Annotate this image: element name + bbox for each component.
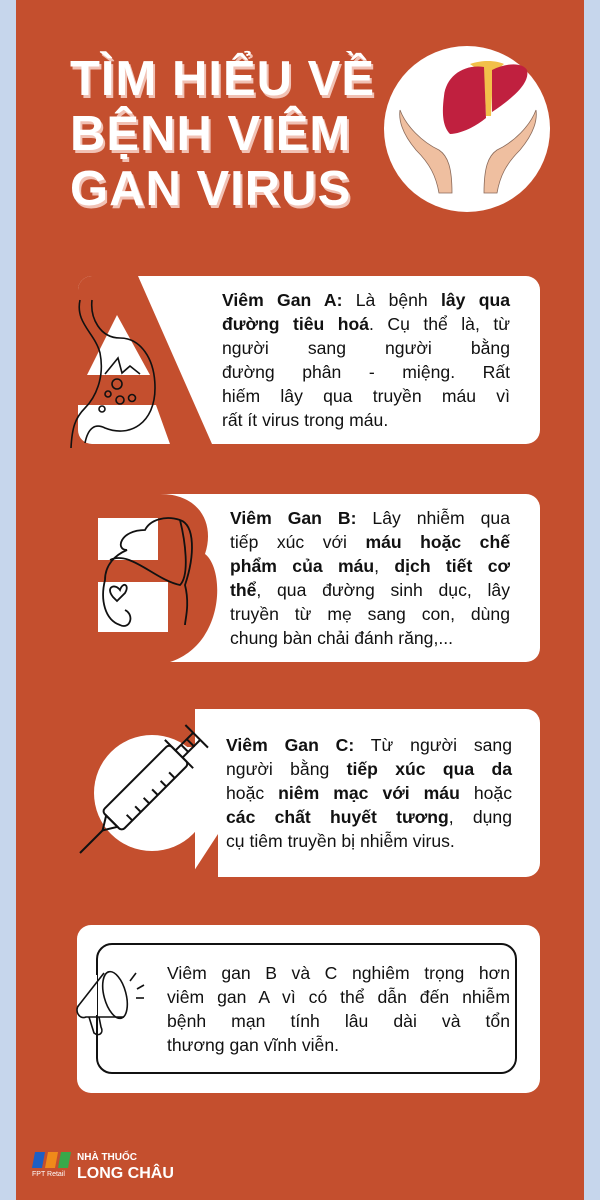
logo: NHÀ THUỐC <box>77 1152 137 1163</box>
text: note: viêm gan A vì có thể dẫn đến nhiễm <box>167 987 510 1007</box>
text: hepatitis C: Viêm Gan C: Từ người sang <box>226 735 512 755</box>
text: hepatitis C: các chất huyết tương, dụng <box>226 807 512 827</box>
logo <box>32 1150 174 1182</box>
title: GAN VIRUS <box>70 162 351 216</box>
text: hepatitis A <box>222 290 510 430</box>
panel: hepatitis B <box>90 494 540 662</box>
text: hepatitis B: truyền từ mẹ sang con, dùng <box>230 604 510 624</box>
text: hepatitis C: hoặc niêm mạc với máu hoặc <box>226 783 512 803</box>
letter C shape <box>94 735 218 877</box>
title: BỆNH VIÊM <box>70 107 351 161</box>
text: hepatitis B: phẩm của máu, dịch tiết cơ <box>230 556 510 576</box>
text: note: Viêm gan B và C nghiêm trọng hơn <box>167 963 510 983</box>
letter B shape <box>90 494 218 662</box>
panel: note <box>77 925 540 1093</box>
text: hepatitis A: người sang người bằng <box>222 338 510 358</box>
text: hepatitis B: tiếp xúc với máu hoặc chế <box>230 532 510 552</box>
text: hepatitis C <box>226 735 512 851</box>
letter A shape <box>78 276 212 444</box>
icon: stomach <box>70 300 156 448</box>
inner outline box <box>96 943 517 1074</box>
text: hepatitis A: đường tiêu hoá. Cụ thể là, từ <box>222 314 510 334</box>
icon: pregnant woman <box>102 517 193 627</box>
text: hepatitis C: người bằng tiếp xúc qua da <box>226 759 512 779</box>
logo: FPT Retail <box>32 1171 65 1178</box>
logo: LONG CHÂU <box>77 1165 174 1182</box>
title <box>70 50 375 216</box>
icon: FPT squares <box>32 1152 71 1168</box>
icon: megaphone <box>76 970 144 1036</box>
panel: hepatitis C <box>195 709 540 877</box>
text: hepatitis A: Viêm Gan A: Là bệnh lây qua <box>222 290 510 310</box>
text: note: thương gan vĩnh viễn. <box>167 1035 339 1055</box>
title: TÌM HIỂU VỀ <box>70 52 375 106</box>
text: hepatitis B: thể, qua đường sinh dục, lây <box>230 580 510 600</box>
text: hepatitis A: hiếm lây qua truyền máu vì <box>222 386 510 406</box>
panel: hepatitis A <box>78 276 540 444</box>
icon: liver in hands <box>384 46 550 212</box>
text: hepatitis B: Viêm Gan B: Lây nhiễm qua <box>230 508 510 528</box>
text: hepatitis A: đường phân - miệng. Rất <box>222 362 510 382</box>
text: hepatitis C: cụ tiêm truyền bị nhiễm virus. <box>226 831 455 851</box>
text: hepatitis A: rất ít virus trong máu. <box>222 410 388 430</box>
text: hepatitis B <box>230 508 510 648</box>
icon: syringe <box>79 724 209 854</box>
text: hepatitis B: chung bàn chải đánh răng,... <box>230 628 453 648</box>
text: note <box>167 963 510 1055</box>
text: note: bệnh mạn tính lâu dài và tổn <box>167 1011 510 1031</box>
